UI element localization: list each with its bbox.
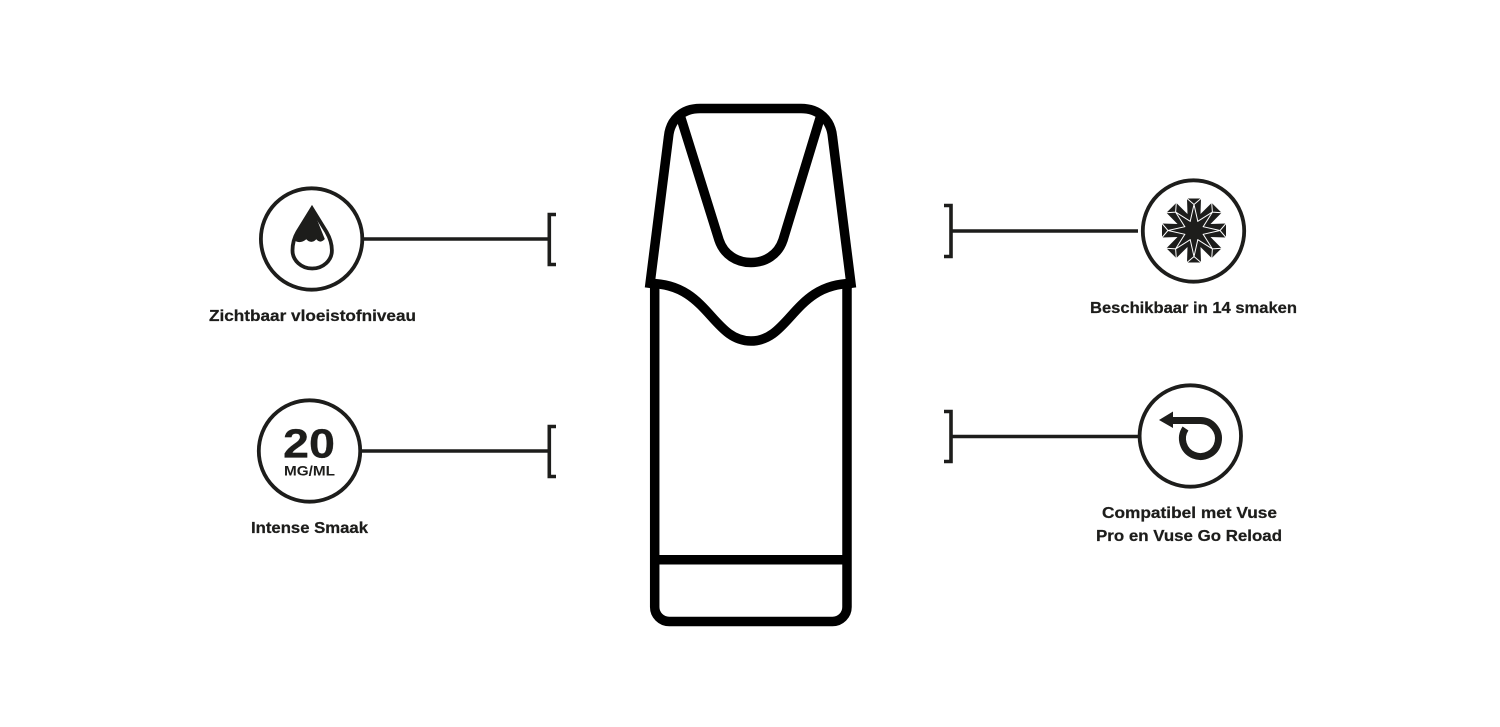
pod base band [655, 555, 847, 564]
label: Zichtbaar vloeistofniveau [209, 308, 416, 325]
pod body [655, 284, 847, 622]
icon: return arrow [1140, 385, 1241, 487]
icon: 20 mg/ml: 20 [283, 420, 335, 466]
label: Intense Smaak [251, 520, 368, 537]
pod mouthpiece opening [680, 115, 821, 262]
callout: flavours [944, 180, 1297, 317]
pod illustration [650, 108, 852, 622]
icon: 20 mg/ml: MG/ML [284, 464, 335, 479]
connector line [361, 426, 556, 476]
callout: compatibility [944, 385, 1282, 545]
label: Compatibel met Vuse [1102, 505, 1277, 522]
pod wave seam [650, 284, 852, 341]
callout: liquid level [209, 188, 556, 325]
pod cap outline [650, 108, 852, 288]
connector line [364, 214, 556, 264]
icon: water drop [261, 188, 362, 290]
icon: 20 mg/ml [259, 400, 360, 502]
label: Beschikbaar in 14 smaken [1090, 300, 1297, 317]
icon: snowflake star [1143, 180, 1244, 282]
connector line [944, 206, 1138, 256]
label: Pro en Vuse Go Reload [1096, 528, 1282, 545]
callout: nicotine strength [251, 400, 556, 537]
connector line [944, 412, 1138, 462]
